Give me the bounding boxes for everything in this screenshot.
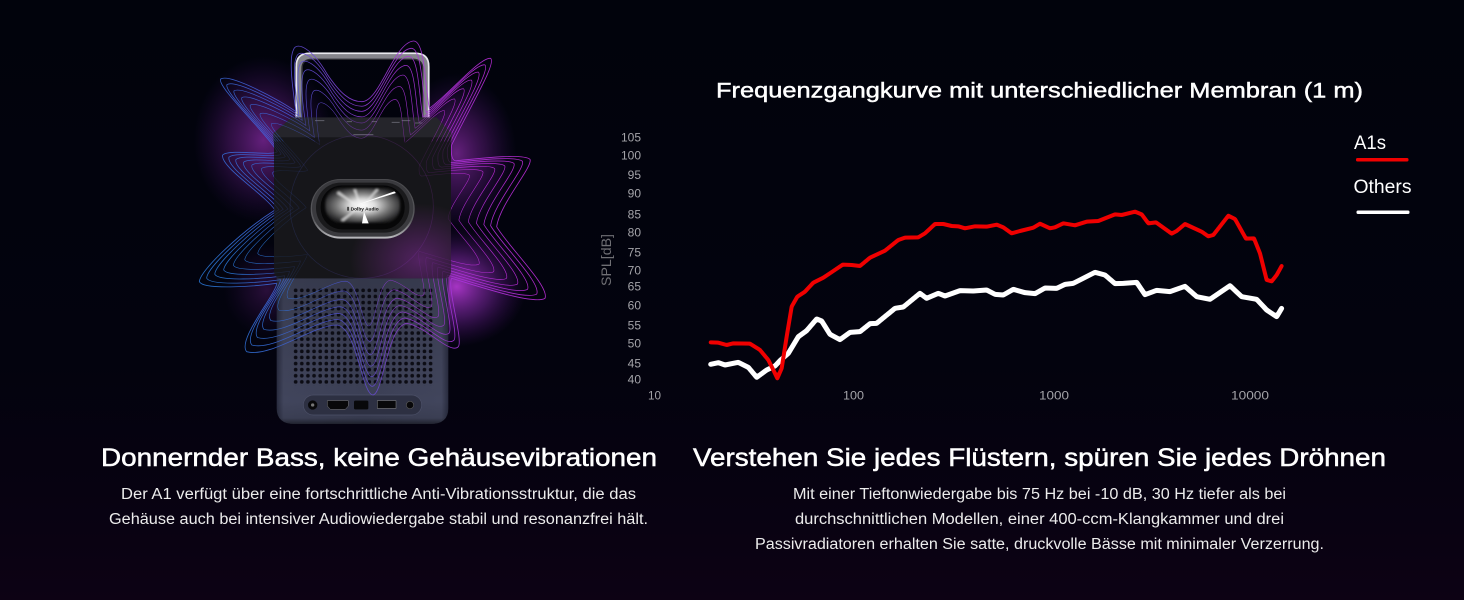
- bright screen: [325, 188, 400, 223]
- y axis labels: 45: [628, 356, 641, 370]
- right body text: Passivradiatoren erhalten Sie satte, druckvolle Bässe mit minimaler Verzerrung.: [755, 536, 1324, 553]
- right body text: Mit einer Tieftonwiedergabe bis 75 Hz bei -10 dB, 30 Hz tiefer als bei: [793, 486, 1286, 503]
- lower grille section: [277, 275, 448, 424]
- y axis labels: 55: [628, 318, 641, 332]
- x axis labels: [648, 390, 1269, 402]
- y axis labels: 65: [628, 280, 641, 294]
- projector illustration with sound waves: [193, 41, 545, 424]
- sound waves over body: [274, 118, 452, 396]
- port panel: [303, 395, 422, 415]
- purple glow: [193, 57, 527, 347]
- legend label Others: Others: [1354, 176, 1412, 198]
- y axis labels: 100: [621, 148, 641, 162]
- legend: [1354, 132, 1412, 214]
- speaker grille: [293, 287, 433, 386]
- y axis labels: 85: [628, 208, 641, 222]
- x axis labels: 10: [648, 390, 661, 402]
- x axis labels: 100: [843, 390, 864, 402]
- legend label A1s: A1s: [1354, 132, 1386, 154]
- y axis labels: 50: [628, 336, 641, 350]
- legend line red: [1356, 158, 1408, 162]
- y axis labels: 90: [628, 186, 641, 200]
- y axis labels: 80: [628, 226, 641, 240]
- red curve: A1s: [711, 212, 1282, 378]
- y axis labels: 95: [628, 168, 641, 182]
- legend line white: [1356, 210, 1410, 214]
- projector body: [273, 117, 452, 424]
- Dolby Audio label: Ⅱ Dolby Audio: [347, 206, 379, 211]
- y axis title: SPL[dB]: [599, 234, 614, 286]
- top lid: [273, 117, 452, 142]
- chart title: Frequenzgangkurve mit unterschiedlicher Membran (1 m): [716, 78, 1363, 102]
- left body text: Gehäuse auch bei intensiver Audiowiedergabe stabil und resonanzfrei hält.: [109, 511, 648, 528]
- lens window: [311, 179, 415, 239]
- right heading: Verstehen Sie jedes Flüstern, spüren Sie jedes Dröhnen: [693, 444, 1386, 472]
- top controls: [315, 121, 422, 135]
- y axis labels: 70: [628, 264, 641, 278]
- right body text: [755, 486, 1324, 553]
- sound waves behind: [199, 41, 545, 395]
- purple reflection on front: [358, 210, 451, 278]
- upper front section: [274, 137, 451, 278]
- x axis labels: 10000: [1231, 390, 1269, 402]
- left body text: [109, 486, 648, 528]
- white curve: Others: [711, 272, 1282, 377]
- x axis labels: 1000: [1039, 390, 1069, 402]
- y axis labels: 60: [628, 298, 641, 312]
- y axis labels: 40: [628, 372, 641, 386]
- frequency response curves: [711, 212, 1282, 378]
- left heading: Donnernder Bass, keine Gehäusevibrationen: [101, 444, 657, 472]
- y axis labels: 105: [621, 130, 641, 144]
- icon: carrying handle: [296, 53, 429, 118]
- right body text: durchschnittlichen Modellen, einer 400-ccm-Klangkammer und drei: [795, 511, 1284, 528]
- y axis labels: 75: [628, 246, 641, 260]
- y axis labels: [621, 130, 641, 386]
- light rays: [357, 191, 396, 223]
- left body text: Der A1 verfügt über eine fortschrittliche Anti-Vibrationsstruktur, die das: [121, 486, 636, 503]
